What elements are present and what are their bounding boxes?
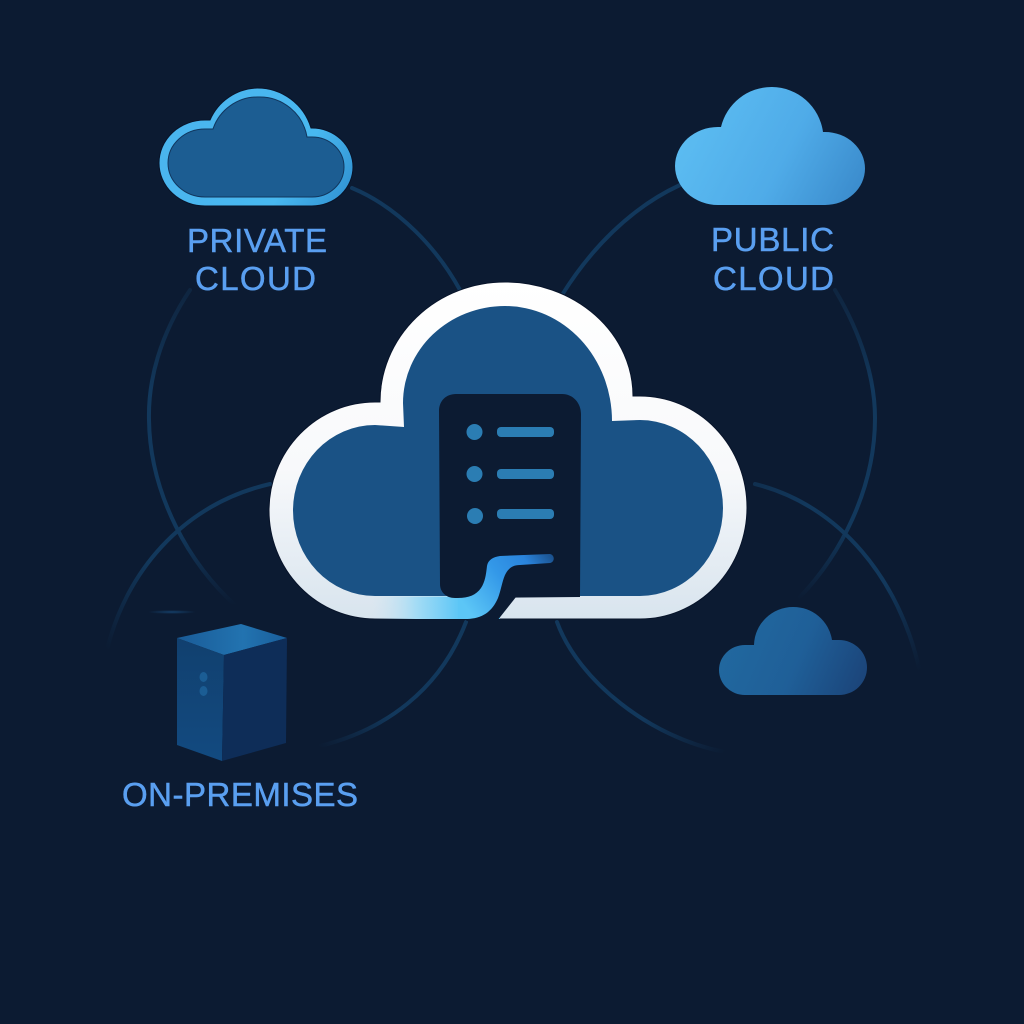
label: private cloud: CLOUD (195, 260, 316, 297)
label: public cloud (711, 221, 834, 297)
list row 2 (466, 466, 554, 482)
list row 1 (466, 424, 554, 440)
infographic canvas (112, 87, 916, 806)
gap in outline (466, 585, 516, 621)
label: private cloud: PRIVATE (187, 222, 327, 259)
label: public cloud: CLOUD (713, 260, 834, 297)
label: on-premises: ON-PREMISES (122, 776, 358, 813)
list row 3 (467, 508, 554, 524)
connecting arcs (107, 185, 920, 752)
cloud outline (269, 282, 747, 619)
icon: small cloud (719, 607, 867, 695)
document panel (439, 394, 581, 598)
icon: public cloud (675, 87, 865, 205)
icon: on-premises server (177, 624, 287, 761)
label: private cloud (187, 222, 327, 297)
central cloud (269, 282, 747, 621)
cloud fill (293, 306, 723, 596)
label: public cloud: PUBLIC (711, 221, 834, 258)
glowing band segment (370, 596, 500, 620)
faint reflection above server (148, 610, 196, 614)
icon: private cloud (159, 88, 353, 206)
swoosh connector (458, 554, 554, 619)
